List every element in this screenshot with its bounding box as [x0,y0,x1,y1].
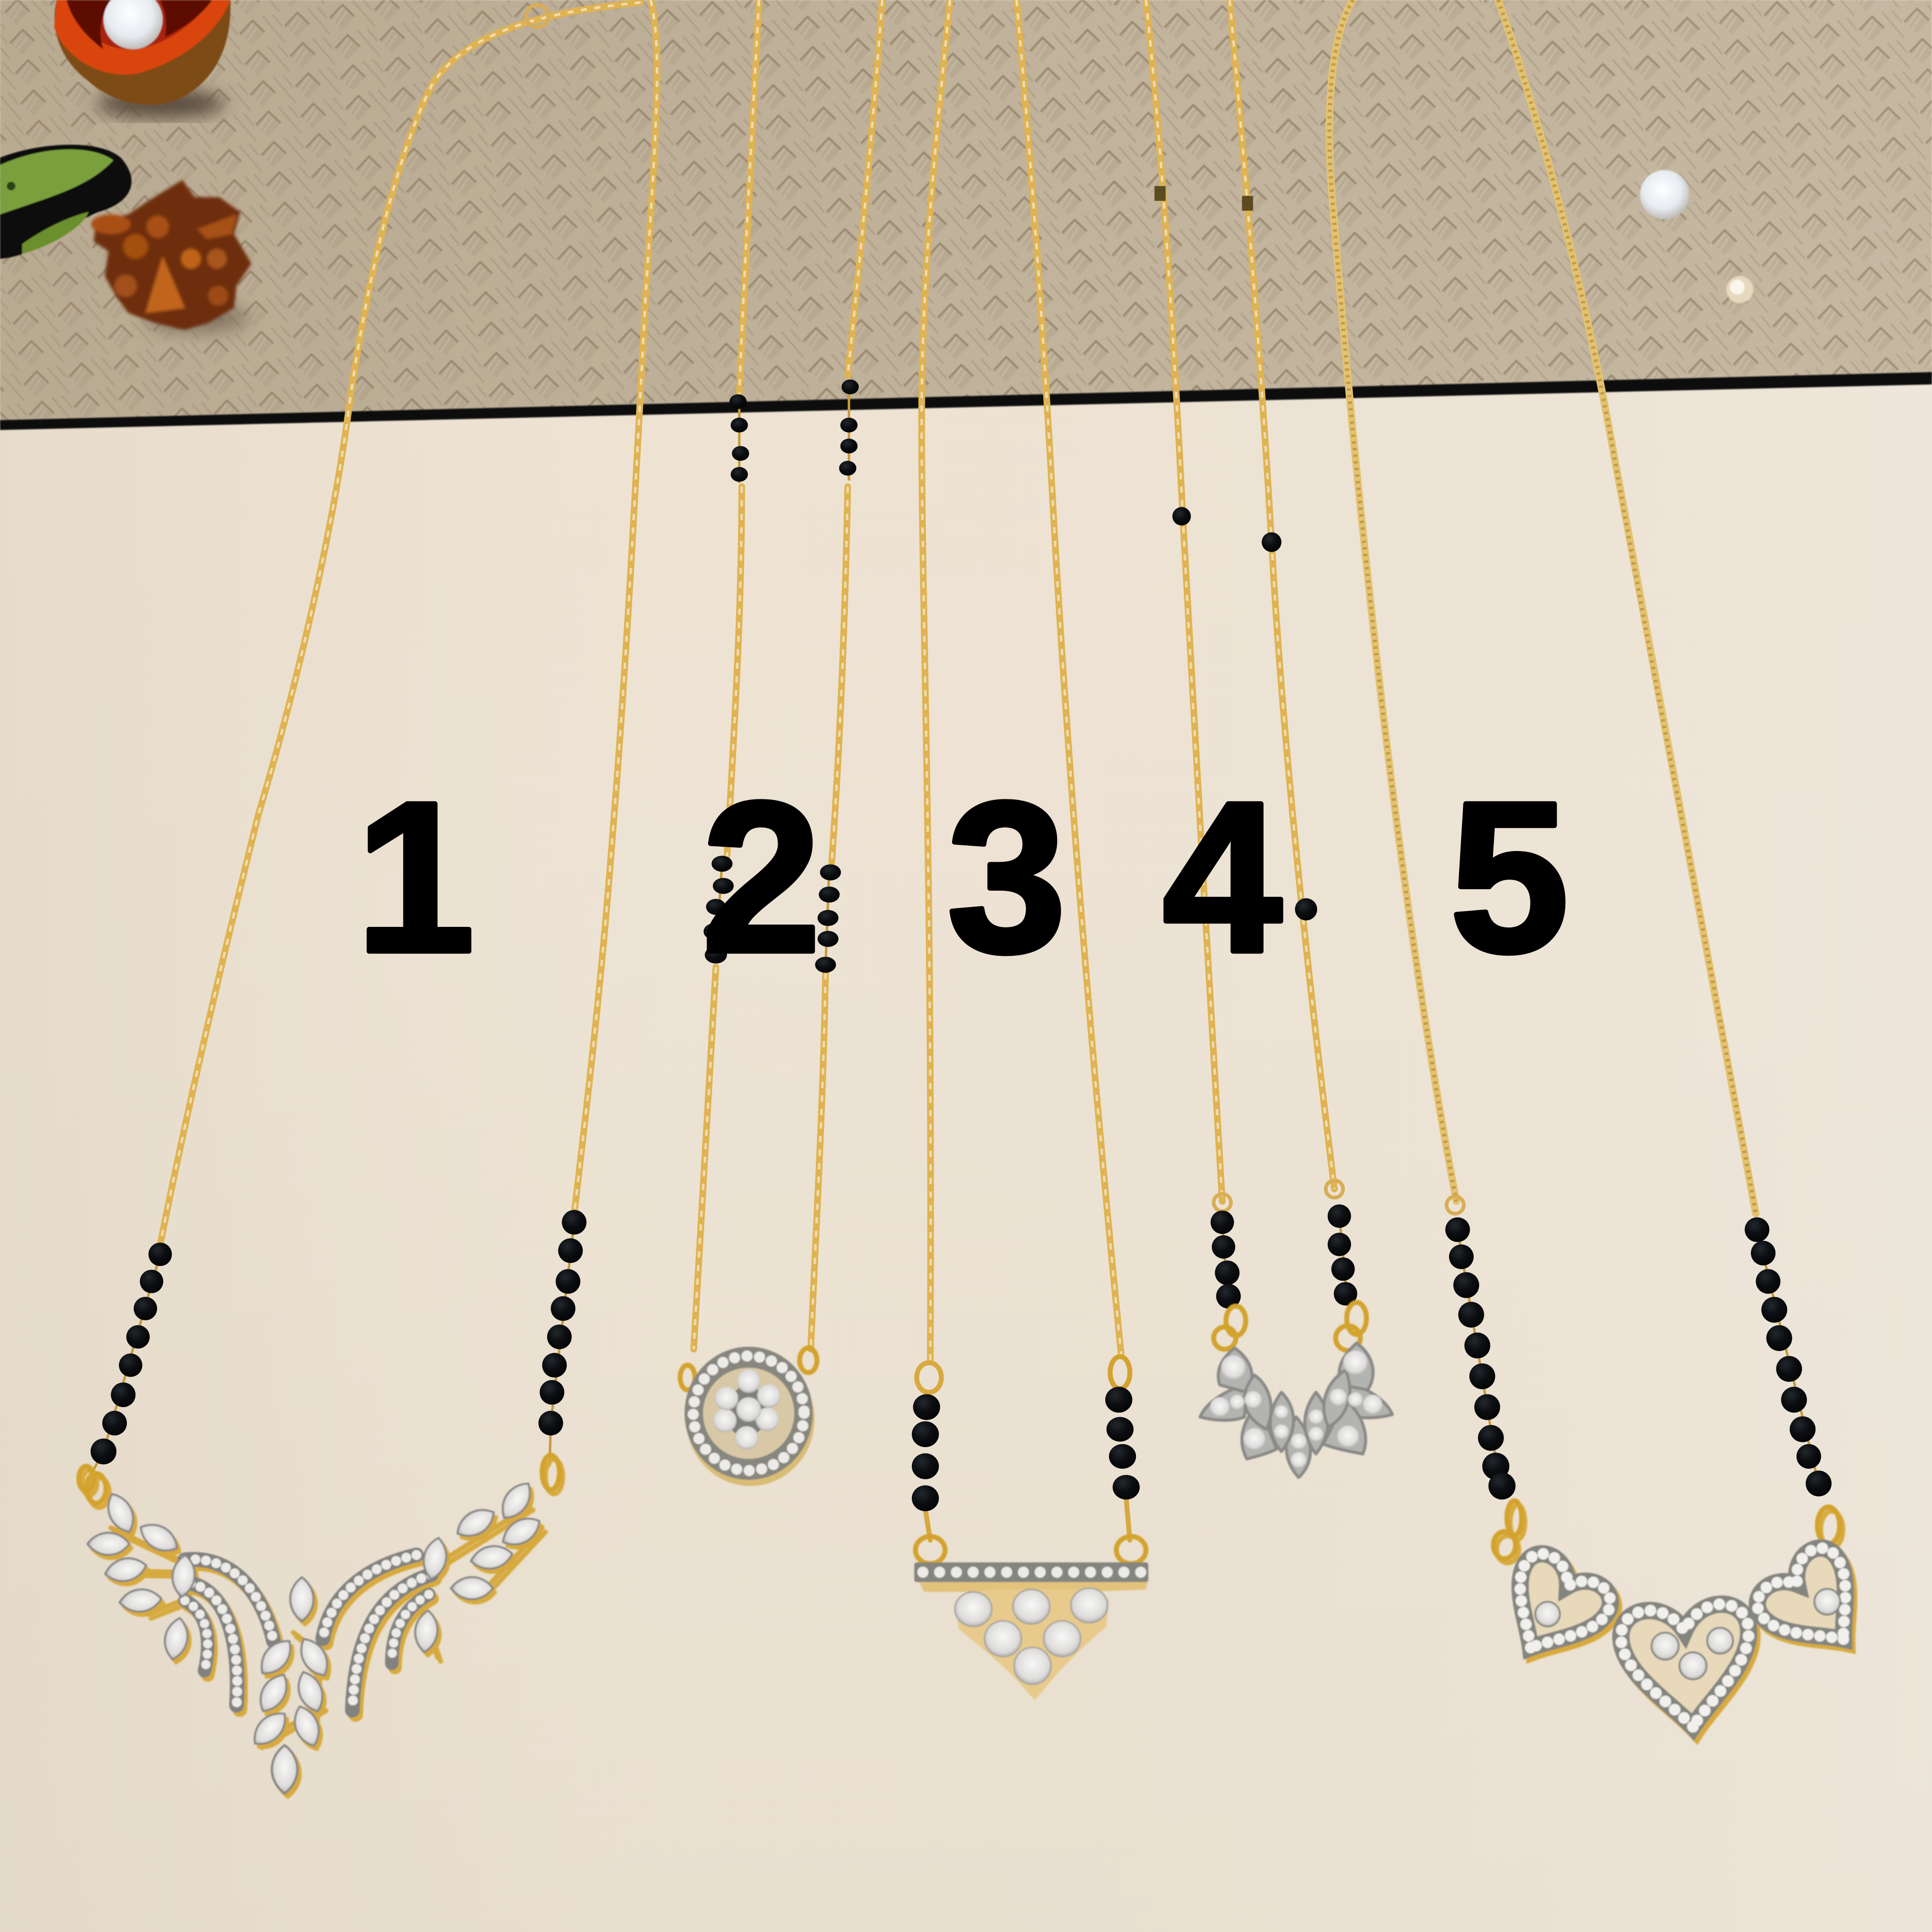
necklace 3 [912,0,1149,1700]
necklace 1 black beads [91,1210,586,1464]
necklace 2 chain [694,0,882,1349]
number label 3: 3 [947,757,1066,997]
number label 2: 2 [702,757,821,997]
necklace 2 [680,0,882,1486]
decoration: orange shell bowl with pearl [54,0,230,118]
necklace 1 wing pendant [79,1455,559,1793]
decoration: loose pearls on mat [1640,170,1753,303]
decoration: rudraksha seed [91,180,251,333]
necklace 3 black beads [912,1387,1140,1511]
necklace 3 chain [917,0,1130,1540]
necklace 5 black beads [1445,1217,1832,1500]
necklace 4 lotus pendant [1200,1302,1392,1477]
right heart [1749,1540,1880,1670]
necklace 2 round pendant [680,1347,817,1486]
necklace 1 chain [89,0,657,1478]
necklace 5 [1329,0,1880,1733]
black mat edge line [0,372,1932,430]
decoration: green cardamom pod [0,145,131,259]
necklace 1 [79,0,657,1793]
number label 5: 5 [1450,757,1569,997]
necklace 4 chain [1146,0,1348,1312]
heart centre stones [1535,1589,1840,1679]
necklace 4 [1146,0,1392,1477]
left heart [1490,1547,1618,1672]
necklace 2 black beads [704,380,859,973]
woven beige mat [0,0,1932,426]
number label 1: 1 [355,757,475,997]
necklace 4 black beads [1172,507,1357,1308]
middle heart [1619,1602,1757,1733]
number label 4: 4 [1163,757,1283,997]
necklace 5 box chain [1329,0,1818,1489]
necklace 5 three hearts pendant [1490,1501,1880,1733]
necklace 3 bar pendant [914,1536,1149,1700]
